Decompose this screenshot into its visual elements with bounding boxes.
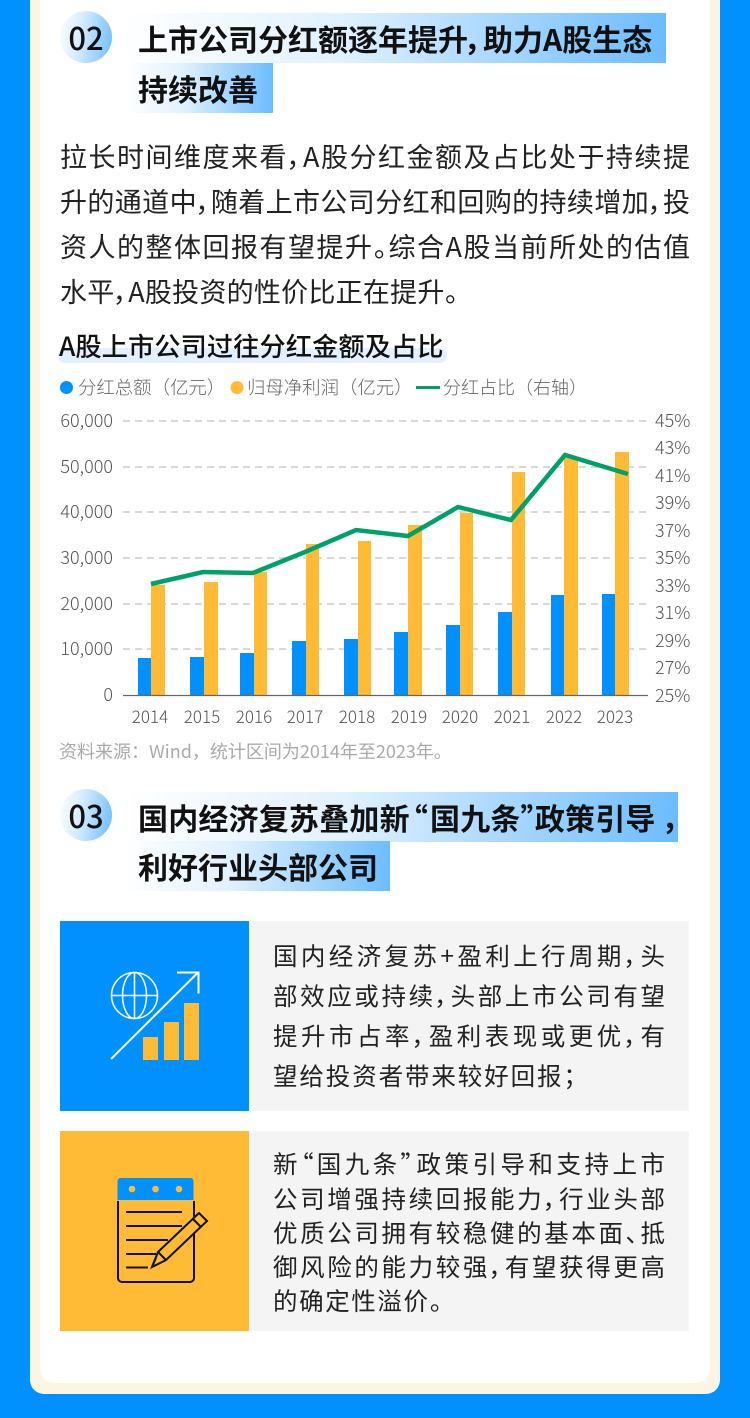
x axis labels: 2022 (546, 703, 582, 728)
section 02 heading: 上市公司分红额逐年提升，助力A股生态 (138, 16, 652, 60)
panel 2 text: 御风险的能力较强，有望获得更高 (273, 1249, 665, 1284)
right axis labels: 45% (655, 407, 690, 433)
right axis labels: 25% (655, 682, 690, 708)
source note: 资料来源：Wind，统计区间为2014年至2023年。 (59, 738, 452, 764)
section 02 body text: 升的通道中，随着上市公司分红和回购的持续增加，投 (60, 181, 690, 220)
panel 2 text: 的确定性溢价。 (273, 1283, 443, 1318)
right axis labels: 37% (655, 517, 690, 543)
panel 1 text: 提升市占率，盈利表现或更优，有 (273, 1018, 665, 1053)
left axis labels: 60,000 (60, 407, 113, 433)
left axis labels: 40,000 (60, 498, 113, 524)
x axis labels: 2017 (287, 703, 323, 728)
section 03 number badge (60, 789, 112, 841)
right axis labels: 31% (655, 599, 690, 625)
icon panel: globe and growth chart (60, 921, 249, 1111)
left axis labels: 10,000 (60, 635, 113, 661)
section 02 number badge (60, 11, 112, 63)
legend (60, 374, 587, 400)
left axis labels (60, 407, 113, 707)
icon panel: notepad (60, 1131, 249, 1331)
x axis labels: 2018 (339, 703, 375, 728)
x axis labels (132, 703, 633, 728)
x axis labels: 2023 (597, 703, 633, 728)
right axis labels: 27% (655, 654, 690, 680)
panel 1 text: 部效应或持续，头部上市公司有望 (273, 978, 665, 1013)
x axis labels: 2019 (391, 703, 427, 728)
green line: dividend ratio (151, 455, 628, 584)
right axis labels: 33% (655, 572, 690, 598)
x axis labels: 2020 (442, 703, 478, 728)
section 02 body text (60, 136, 690, 310)
right axis labels: 29% (655, 627, 690, 653)
section 02 body text: 拉长时间维度来看，A股分红金额及占比处于持续提 (60, 136, 690, 175)
panel 2 text (273, 1146, 665, 1318)
panel 1 text: 望给投资者带来较好回报； (273, 1058, 578, 1093)
left axis labels: 30,000 (60, 544, 113, 570)
icon: notepad and pencil (117, 1178, 208, 1283)
x axis labels: 2014 (132, 703, 168, 728)
section 03 number badge: 03 (68, 792, 104, 837)
section 03 heading (138, 792, 681, 891)
panel 1 text: 国内经济复苏+盈利上行周期，头 (273, 938, 665, 973)
legend: 分红占比（右轴） (443, 374, 587, 400)
left axis labels: 20,000 (60, 590, 113, 616)
panel: policy support (60, 1131, 689, 1331)
right axis labels: 43% (655, 434, 690, 460)
x axis labels: 2021 (494, 703, 530, 728)
icon: globe and rising bars (110, 972, 200, 1060)
section 02 body text: 资人的整体回报有望提升。综合A股当前所处的估值 (60, 226, 690, 265)
orange bars: net profit (151, 452, 629, 695)
x axis line (123, 694, 648, 696)
chart title: A股上市公司过往分红金额及占比 (59, 325, 444, 364)
x axis labels: 2016 (236, 703, 272, 728)
right axis labels: 39% (655, 489, 690, 515)
panel 1 text (273, 938, 665, 1093)
blue bars: dividend total (138, 594, 615, 695)
panel 2 text: 公司增强持续回报能力，行业头部 (273, 1181, 665, 1216)
left axis labels: 50,000 (60, 453, 113, 479)
grid lines (123, 421, 647, 649)
legend: 归母净利润（亿元） (247, 374, 413, 400)
section 02 body text: 水平，A股投资的性价比正在提升。 (60, 271, 458, 310)
section 03 heading: 国内经济复苏叠加新“国九条”政策引导 ， (138, 795, 681, 839)
right axis labels: 41% (655, 462, 690, 488)
section 02 heading: 持续改善 (138, 66, 258, 110)
legend: 分红总额（亿元） (78, 374, 225, 400)
panel 2 text: 新“国九条”政策引导和支持上市 (273, 1146, 665, 1181)
chart legend and combo chart (60, 374, 690, 728)
section 02 number badge: 02 (68, 14, 104, 59)
panel 2 text: 优质公司拥有较稳健的基本面、抵 (273, 1215, 665, 1250)
section 02 heading (138, 13, 666, 113)
right axis labels: 35% (655, 544, 690, 570)
section 03 heading: 利好行业头部公司 (138, 844, 378, 888)
panel: leading companies (60, 921, 689, 1111)
left axis labels: 0 (103, 681, 113, 707)
right axis labels (655, 407, 690, 708)
x axis labels: 2015 (184, 703, 220, 728)
